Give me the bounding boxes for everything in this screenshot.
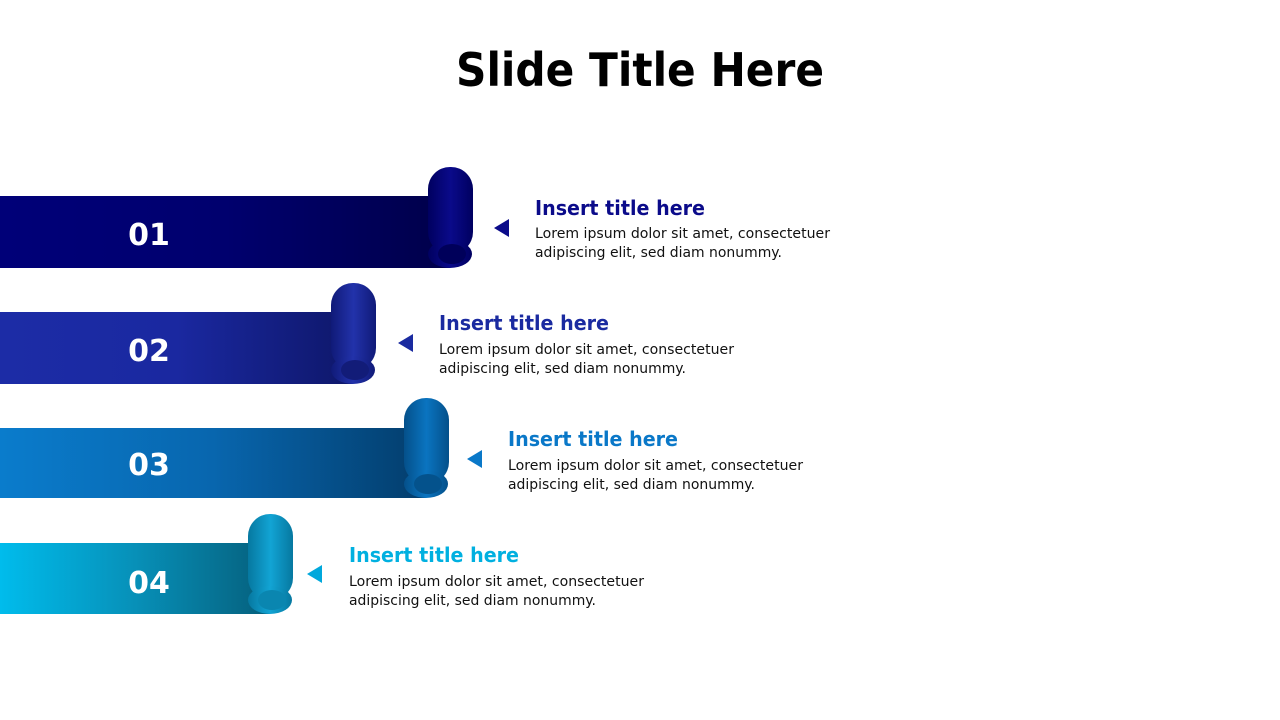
text 2: adipiscing elit, sed diam nonummy. — [439, 361, 686, 377]
row 2 — [0, 283, 734, 384]
arrow 1 — [494, 219, 509, 237]
text 1: Lorem ipsum dolor sit amet, consectetuer — [535, 226, 830, 242]
text 4: adipiscing elit, sed diam nonummy. — [349, 593, 596, 609]
bar 2 — [0, 283, 376, 384]
text 3 — [508, 427, 803, 493]
text 2 — [439, 311, 734, 377]
bar 3 — [0, 398, 449, 498]
text 1: Insert title here — [535, 196, 705, 220]
text 1: adipiscing elit, sed diam nonummy. — [535, 245, 782, 261]
bar 1: 01 — [128, 218, 170, 253]
bar 4: 04 — [128, 566, 170, 601]
text 2: Insert title here — [439, 311, 609, 335]
row 4 — [0, 514, 644, 614]
row 1 — [0, 167, 830, 268]
text 3: Insert title here — [508, 427, 678, 451]
arrow 3 — [467, 450, 482, 468]
arrow 4 — [307, 565, 322, 583]
text 2: Lorem ipsum dolor sit amet, consectetuer — [439, 342, 734, 358]
text 3: Lorem ipsum dolor sit amet, consectetuer — [508, 458, 803, 474]
title: Slide Title Here — [456, 43, 824, 97]
text 3: adipiscing elit, sed diam nonummy. — [508, 477, 755, 493]
text 4 — [349, 543, 644, 609]
text 1 — [535, 196, 830, 261]
bar 4 — [0, 514, 293, 614]
row 3 — [0, 398, 803, 498]
bar 3: 03 — [128, 448, 170, 483]
bar 1 — [0, 167, 473, 268]
bar 2: 02 — [128, 334, 170, 369]
text 4: Lorem ipsum dolor sit amet, consectetuer — [349, 574, 644, 590]
text 4: Insert title here — [349, 543, 519, 567]
arrow 2 — [398, 334, 413, 352]
